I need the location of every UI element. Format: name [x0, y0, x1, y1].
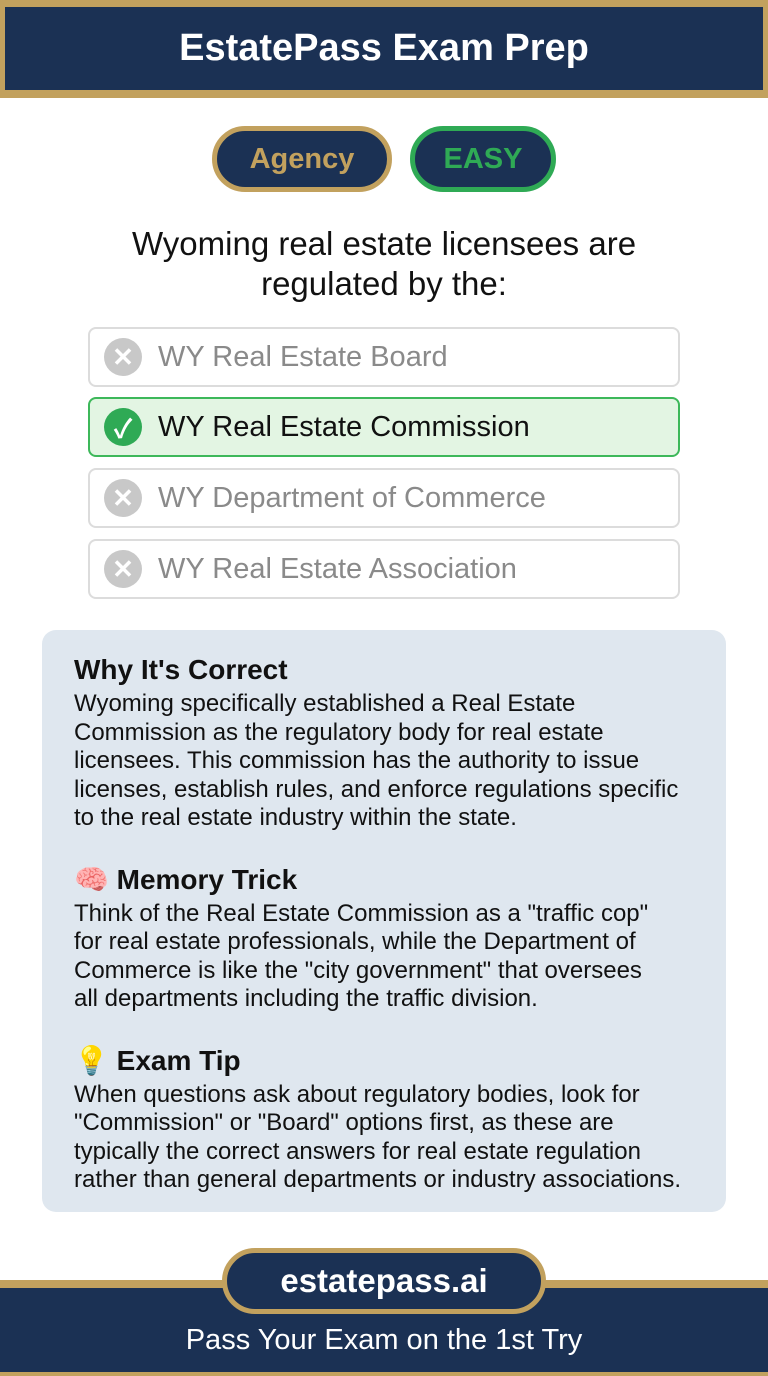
option A: WY Real Estate Board [158, 340, 448, 372]
option C: ✕ [112, 482, 134, 512]
option D: WY Real Estate Association [158, 552, 517, 584]
question: regulated by the: [261, 265, 507, 302]
memory trick: Think of the Real Estate Commission as a "traffic cop" [74, 900, 648, 926]
footer band [0, 1280, 768, 1376]
why correct: licensees. This commission has the authority to issue [74, 747, 639, 774]
exam tip: "Commission" or "Board" options first, as these are [74, 1109, 614, 1136]
exam tip [74, 1044, 681, 1193]
option A [88, 327, 680, 387]
option D: ✕ [112, 554, 134, 584]
header banner [0, 0, 768, 98]
memory trick: all departments including the traffic division. [74, 985, 538, 1012]
option D [88, 539, 680, 599]
footer band: Pass Your Exam on the 1st Try [186, 1324, 582, 1356]
badge: EASY [410, 126, 556, 192]
option B correct: ✓ [114, 414, 132, 444]
footer url pill: estatepass.ai [280, 1262, 488, 1299]
question: Wyoming real estate licensees are [132, 225, 636, 262]
memory trick [74, 864, 648, 1012]
explanation panel [42, 630, 726, 1212]
why correct: Commission as the regulatory body for real estate [74, 718, 604, 746]
memory trick: 🧠 Memory Trick [74, 864, 297, 894]
badge: EASY: EASY [444, 143, 522, 175]
why correct: Wyoming specifically established a Real Estate [74, 690, 575, 717]
why correct: licenses, establish rules, and enforce regulations specific [74, 776, 678, 802]
why correct [74, 654, 678, 831]
exam tip: typically the correct answers for real estate regulation [74, 1138, 641, 1164]
question [132, 225, 636, 302]
why correct: to the real estate industry within the state. [74, 804, 517, 831]
badge: Agency: Agency [250, 143, 354, 175]
memory trick: Commerce is like the "city government" that oversees [74, 956, 642, 984]
option B correct: WY Real Estate Commission [158, 410, 530, 442]
header banner: EstatePass Exam Prep [179, 27, 589, 69]
option C: WY Department of Commerce [158, 482, 546, 514]
exam tip: rather than general departments or industry associations. [74, 1166, 681, 1193]
option C [88, 468, 680, 528]
option B correct [88, 397, 680, 457]
option A: ✕ [112, 342, 134, 372]
badge: Agency [212, 126, 392, 192]
memory trick: for real estate professionals, while the Department of [74, 928, 636, 955]
why correct: Why It's Correct [74, 654, 288, 685]
exam tip: When questions ask about regulatory bodies, look for [74, 1080, 640, 1108]
exam tip: 💡 Exam Tip [74, 1044, 241, 1076]
footer url pill [222, 1248, 546, 1314]
